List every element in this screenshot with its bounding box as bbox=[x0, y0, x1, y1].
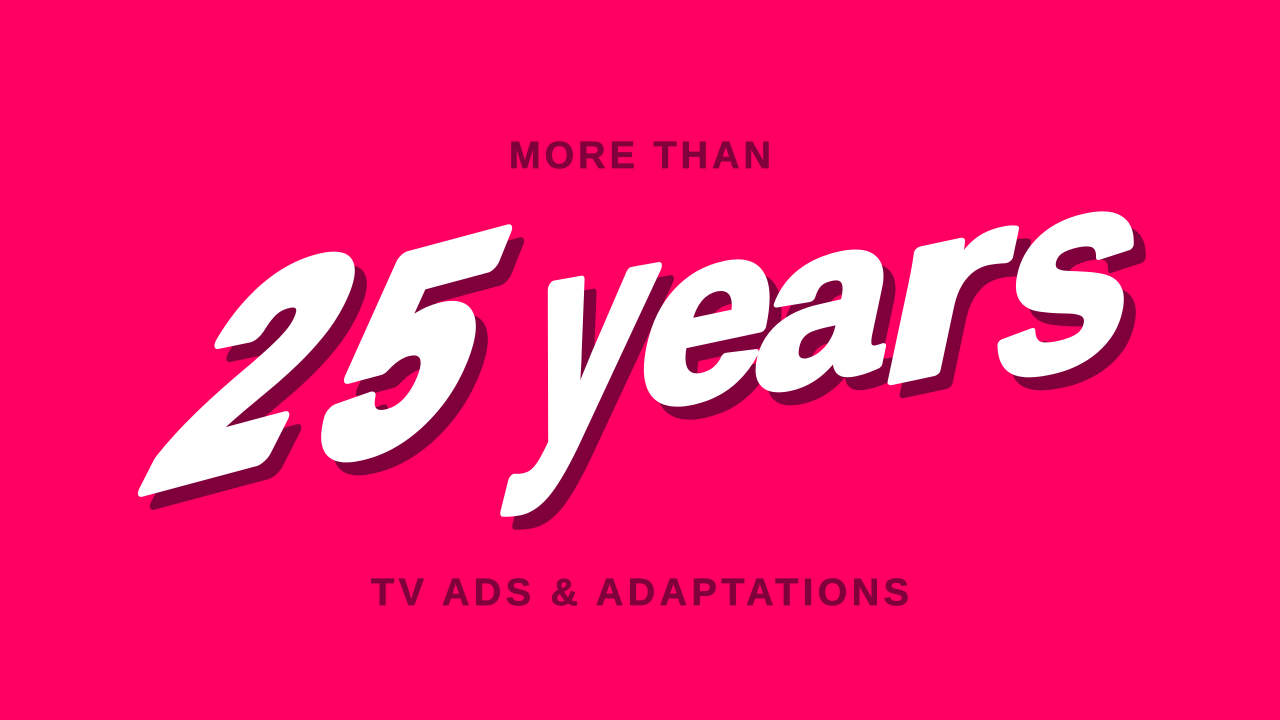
title shadow: s bbox=[984, 116, 1185, 455]
script title: 25 years bbox=[108, 103, 1185, 564]
title shadow: 2 bbox=[120, 200, 419, 564]
title lettering: 2 bbox=[108, 187, 407, 551]
title lettering: y bbox=[493, 152, 689, 517]
title shadow bbox=[120, 116, 1185, 564]
title lettering: e bbox=[617, 162, 804, 464]
title shadow: 5 bbox=[292, 181, 557, 540]
title lettering: a bbox=[736, 157, 923, 444]
title shadow: r bbox=[873, 150, 1050, 450]
heading: more than: MORE THAN bbox=[509, 135, 771, 177]
title shadow: a bbox=[748, 170, 935, 457]
title lettering: 5 bbox=[280, 168, 545, 527]
title lettering bbox=[108, 103, 1173, 551]
title shadow: y bbox=[505, 165, 701, 530]
title shadow: e bbox=[629, 175, 816, 477]
title lettering: r bbox=[861, 137, 1038, 437]
subheading: tv ads & adaptations: TV ADS & ADAPTATIONS bbox=[371, 572, 909, 614]
title lettering: s bbox=[972, 103, 1173, 442]
